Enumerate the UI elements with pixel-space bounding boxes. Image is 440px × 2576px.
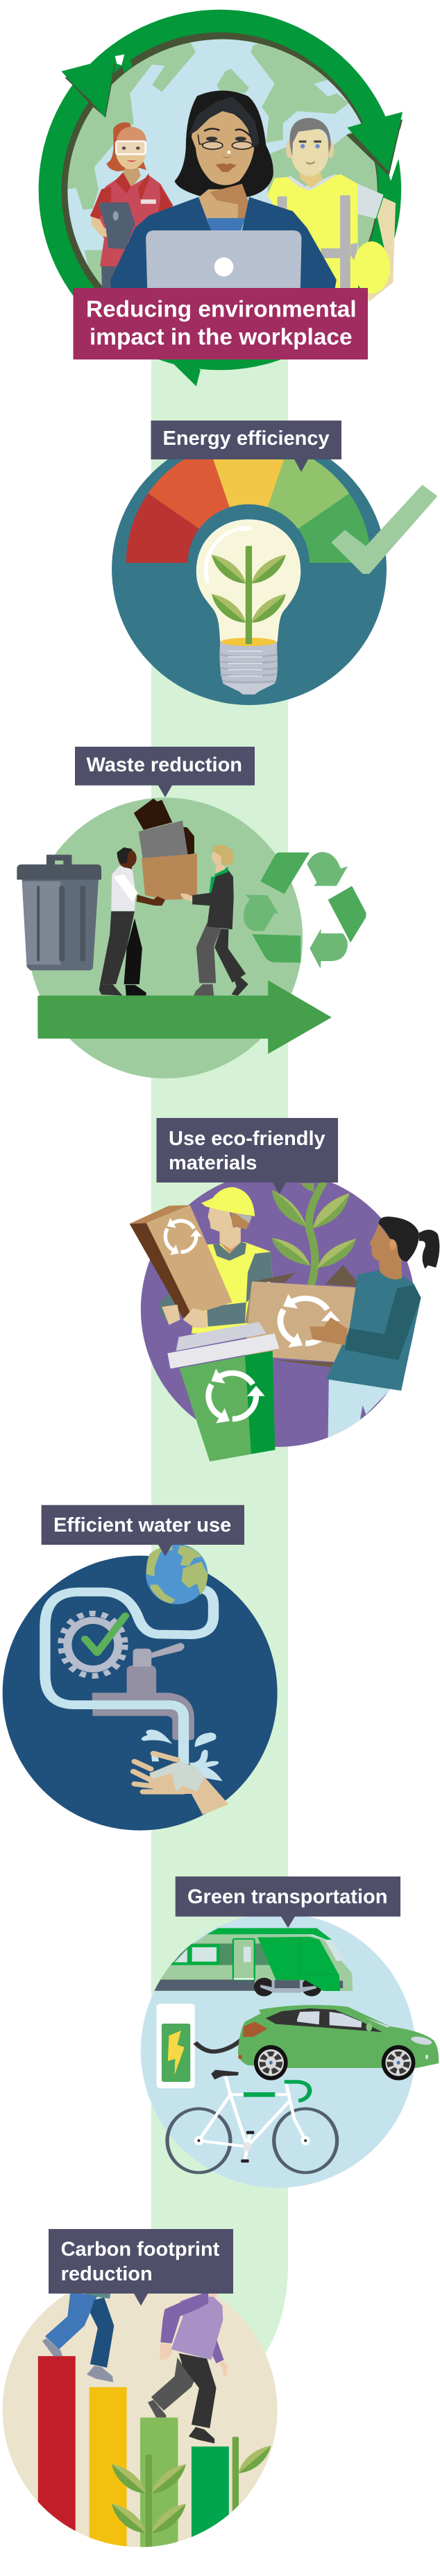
person: blue trousers xyxy=(42,2291,114,2382)
gear with check xyxy=(61,1613,126,1676)
worker: hi-vis vest xyxy=(262,118,396,302)
water splash xyxy=(142,1729,223,1781)
label: efficient water use: Efficient water use xyxy=(53,1514,231,1536)
cardboard box xyxy=(245,1265,363,1369)
panel: green transportation xyxy=(141,1913,439,2188)
circle background xyxy=(3,1556,278,1831)
panel: eco-friendly materials xyxy=(130,1171,439,1461)
recycling ring xyxy=(39,10,401,387)
bin xyxy=(17,855,101,970)
person: purple sweater xyxy=(148,2291,228,2443)
label: green transportation xyxy=(176,1876,400,1928)
worker: red shirt xyxy=(90,122,174,288)
circle background xyxy=(28,797,303,1078)
panel: energy efficiency xyxy=(112,459,437,705)
label: energy efficiency: Energy efficiency xyxy=(162,427,330,450)
circle background xyxy=(141,1171,416,1447)
globe xyxy=(146,1544,208,1604)
plants xyxy=(112,2437,271,2553)
water pipe xyxy=(45,1589,214,1764)
check mark xyxy=(332,486,437,573)
boxes xyxy=(134,799,197,900)
label: carbon footprint reduction: reduction xyxy=(61,2263,153,2285)
background strip xyxy=(151,347,288,2366)
panel: carbon footprint reduction xyxy=(3,2294,278,2547)
panel: waste reduction xyxy=(17,797,366,1078)
label: green transportation: Green transportation xyxy=(187,1886,387,1908)
title banner xyxy=(74,288,368,359)
circle background xyxy=(112,433,387,705)
label: waste reduction xyxy=(75,747,255,797)
label: eco-friendly materials: Use eco-friendly xyxy=(169,1128,325,1150)
worker: woman with laptop xyxy=(110,90,337,288)
label: efficient water use xyxy=(42,1505,244,1557)
man with boards xyxy=(130,1187,273,1334)
charging station xyxy=(157,2003,244,2088)
circle background xyxy=(141,1913,416,2188)
green arrow xyxy=(37,981,332,1054)
hands xyxy=(133,1754,228,1815)
recycling bin xyxy=(167,1322,279,1461)
label: energy efficiency xyxy=(151,421,341,472)
plant xyxy=(272,1182,356,1285)
man right xyxy=(180,845,248,996)
label: carbon footprint reduction xyxy=(49,2229,233,2305)
woman with box xyxy=(310,1217,439,1391)
faucet xyxy=(92,1643,194,1740)
panel: efficient water use xyxy=(3,1544,278,1831)
bar chart xyxy=(38,2356,229,2559)
label: carbon footprint reduction: Carbon footprint xyxy=(61,2239,220,2261)
title banner: Reducing environmental xyxy=(86,297,357,322)
train xyxy=(152,1928,353,1997)
panel: title illustration xyxy=(39,10,405,387)
woman trousers xyxy=(328,1380,390,1438)
light bulb xyxy=(196,519,301,695)
label: eco-friendly materials xyxy=(157,1118,338,1194)
ring arrowheads xyxy=(61,46,405,181)
label: eco-friendly materials: materials xyxy=(169,1152,257,1174)
title banner: impact in the workplace xyxy=(90,325,353,350)
bicycle xyxy=(167,2070,337,2173)
label: waste reduction: Waste reduction xyxy=(86,754,242,777)
globe xyxy=(67,39,378,286)
electric car xyxy=(238,2005,439,2081)
recycling symbol xyxy=(244,852,366,969)
gauge xyxy=(126,459,369,564)
circle background xyxy=(3,2273,278,2547)
man left xyxy=(99,847,165,996)
